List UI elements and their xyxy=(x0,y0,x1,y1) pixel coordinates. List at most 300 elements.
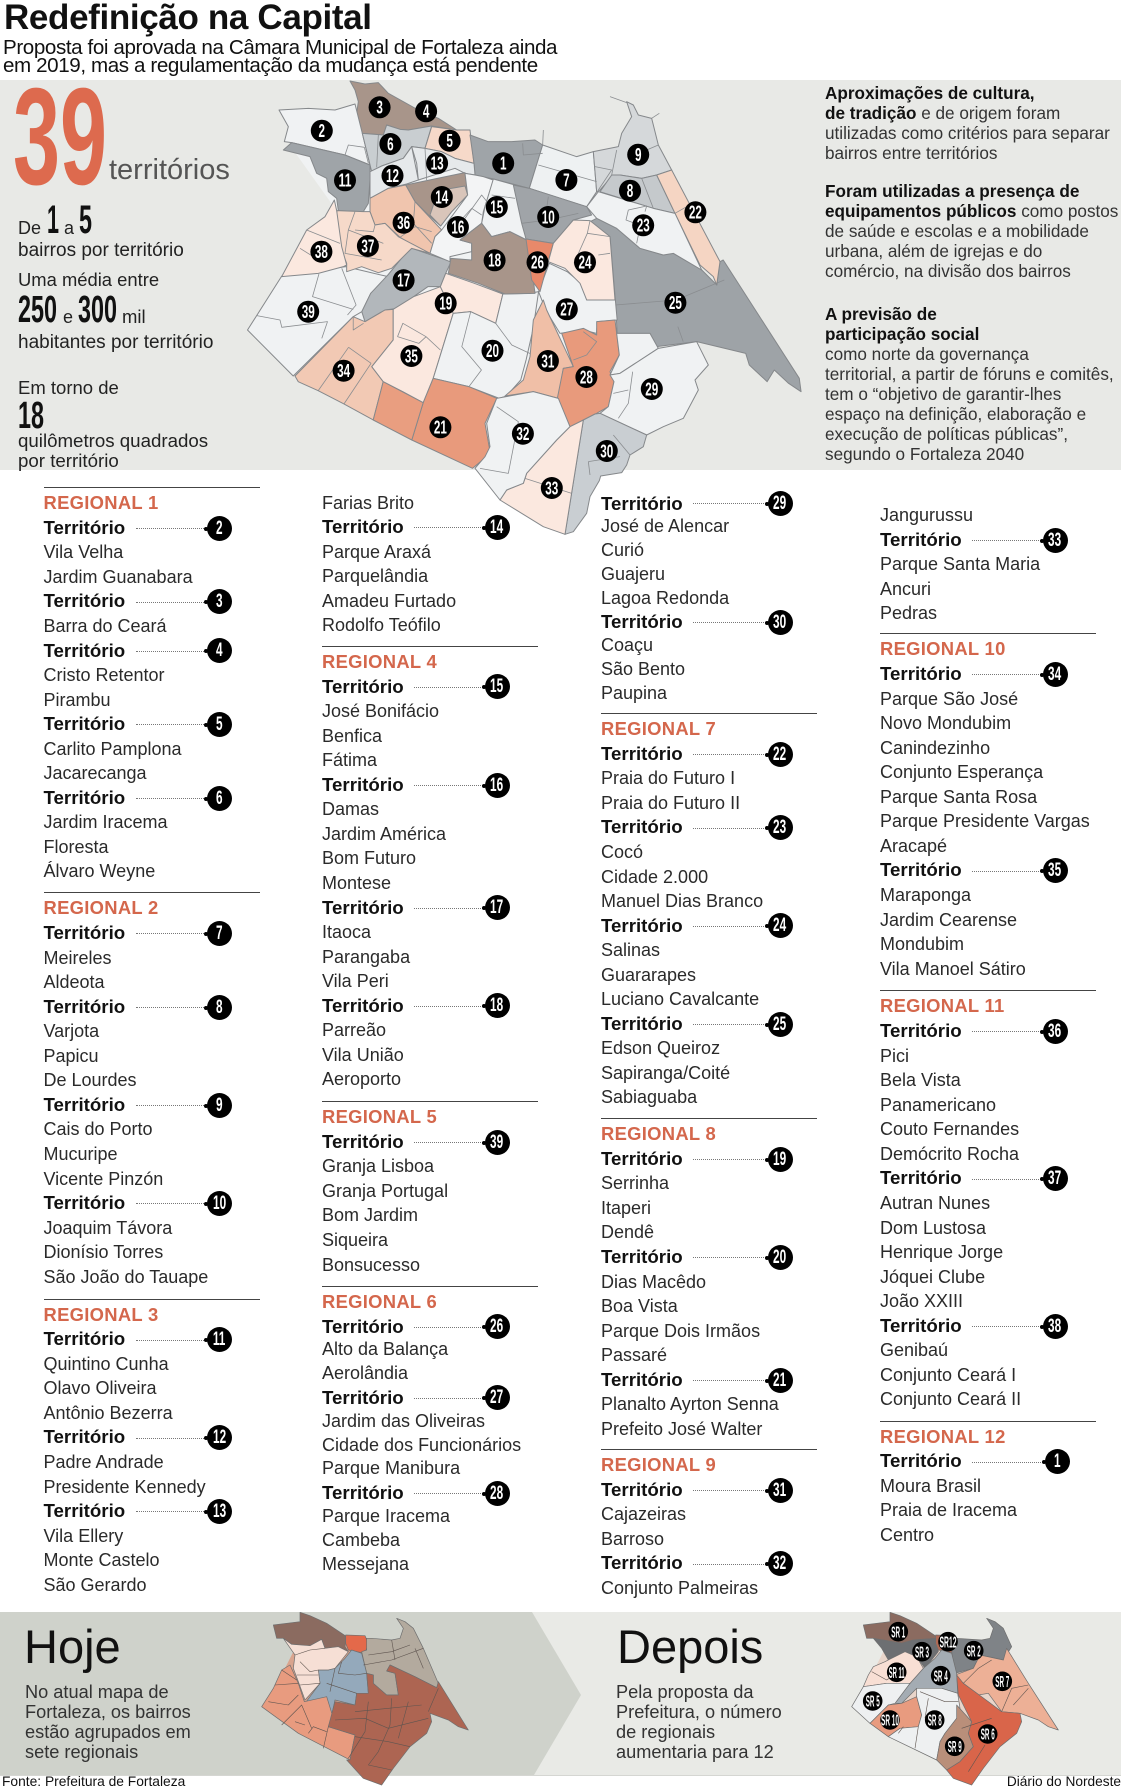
badge SR 5 xyxy=(863,1691,882,1711)
SR badges: SR 8 xyxy=(928,1713,942,1730)
badge SR 3 xyxy=(912,1642,932,1661)
panel: regional 5: Bonsucesso xyxy=(322,1255,420,1275)
território 20: Território xyxy=(601,1246,683,1267)
badge 7: 7 xyxy=(563,170,570,190)
território 12: Território xyxy=(44,1426,125,1447)
panel: regional 10: Novo Mondubim xyxy=(880,713,1011,733)
panel: regional 6: Jardim das Oliveiras xyxy=(322,1411,485,1431)
território 7: 7 xyxy=(216,923,223,944)
map inner fill xyxy=(268,1628,455,1778)
text block: equipamentos públicos: equipamentos públicos como postos xyxy=(825,200,1118,220)
panel: regional 10 xyxy=(880,633,1096,981)
label territórios: territórios xyxy=(109,154,230,186)
panel: regional 8 xyxy=(601,1118,817,1441)
SR badges: SR 6 xyxy=(981,1727,995,1744)
panel: regional 11: Bela Vista xyxy=(880,1070,961,1090)
território 31: 31 xyxy=(773,1480,787,1501)
badge 23: 23 xyxy=(637,216,650,236)
SR 9 xyxy=(937,1705,973,1770)
panel: regional 6 xyxy=(322,1286,538,1574)
território 24 xyxy=(601,913,793,938)
panel: regional 4: Vila União xyxy=(322,1045,404,1065)
panel: regional 3: Presidente Kennedy xyxy=(44,1477,206,1497)
território 3 xyxy=(44,589,232,614)
stat: 250 e 300 mil habitantes: habitantes por território xyxy=(18,332,213,353)
panel: regional 9: Cajazeiras xyxy=(601,1504,686,1524)
panel: regional 4: Damas xyxy=(322,799,379,819)
território 11 xyxy=(44,1327,232,1352)
badge 16: 16 xyxy=(451,217,464,237)
panel: regional 4: Parreão xyxy=(322,1020,386,1040)
panel: regional 2: Papicu xyxy=(44,1046,99,1066)
panel: regional 4: Jardim América xyxy=(322,824,446,844)
SR 5 xyxy=(852,1683,910,1723)
badge SR 1 xyxy=(888,1622,908,1641)
território 34 xyxy=(880,662,1096,687)
panel: regional 9 continued: Parque Santa Maria xyxy=(880,554,1040,574)
territory 28 xyxy=(557,320,619,427)
panel: regional 7: Sabiaguaba xyxy=(601,1087,697,1107)
panel: regional 11: Panamericano xyxy=(880,1095,996,1115)
panel: regional 11: Conjunto Ceará I xyxy=(880,1365,1016,1385)
território 14: 14 xyxy=(490,517,504,538)
território 19: Território xyxy=(601,1148,683,1169)
badge 8: 8 xyxy=(627,181,633,201)
panel: regional 1: Jardim Iracema xyxy=(44,812,168,832)
panel: regional 10: Mondubim xyxy=(880,934,964,954)
panel: regional 3: Padre Andrade xyxy=(44,1452,164,1472)
território 18 xyxy=(322,993,510,1018)
panel: regional 3 xyxy=(44,1299,260,1595)
heading regional 5 xyxy=(322,1101,538,1130)
panel: regional 10: Maraponga xyxy=(880,885,971,905)
badge 31 xyxy=(537,350,559,372)
text block: participação social: segundo o Fortaleza 2040 xyxy=(825,444,1024,464)
territory 29 xyxy=(600,342,708,435)
heading regional 6: REGIONAL 6 xyxy=(322,1291,437,1312)
panel: regional 10: Canindezinho xyxy=(880,738,990,758)
text block: equipamentos públicos: urbana, além de igrejas e do xyxy=(825,240,1042,260)
território 15 xyxy=(322,674,510,699)
territory 20 xyxy=(433,292,539,398)
text block: depois: de regionais xyxy=(616,1722,715,1742)
panel: regional 5 xyxy=(322,1101,538,1275)
panel: regional 1: Vila Velha xyxy=(44,542,123,562)
SR badges: SR 9 xyxy=(948,1739,962,1756)
territory 2 xyxy=(279,104,370,165)
SR 8 xyxy=(888,1688,960,1760)
território 29 xyxy=(601,491,793,516)
territory 33 xyxy=(500,420,583,534)
panel: regional 8: Planalto Ayrton Senna xyxy=(601,1394,779,1414)
text block: cultura e tradição: utilizadas como critérios para separar xyxy=(825,122,1110,142)
território 15: 15 xyxy=(490,676,504,697)
território 2 xyxy=(44,516,232,541)
território 8: Território xyxy=(44,996,125,1017)
panel: regional 9: Conjunto Palmeiras xyxy=(601,1578,758,1598)
text block: participação social: execução de políticas públicas”, xyxy=(825,424,1068,444)
território 12 xyxy=(44,1425,232,1450)
território 27: Território xyxy=(322,1387,404,1408)
heading regional 10: REGIONAL 10 xyxy=(880,638,1006,659)
badge 34 xyxy=(333,360,355,382)
territory 39 xyxy=(248,267,388,376)
text block: depois xyxy=(616,1682,782,1762)
panel: regional 8: Prefeito José Walter xyxy=(601,1419,762,1439)
SR 2 xyxy=(952,1618,1012,1673)
panel: regional 1: Floresta xyxy=(44,837,109,857)
território 39 xyxy=(322,1130,510,1155)
panel: regional 1: Cristo Retentor xyxy=(44,665,165,685)
heading regional 12 xyxy=(880,1420,1096,1449)
badge SR 7 xyxy=(992,1672,1012,1691)
badge 6 xyxy=(379,133,401,155)
badge 32: 32 xyxy=(516,424,529,444)
text block: hoje: Fortaleza, os bairros xyxy=(25,1702,191,1722)
SR badges: SR 10 xyxy=(881,1713,899,1730)
panel: regional 1: Pirambu xyxy=(44,690,111,710)
território 33: 33 xyxy=(1048,530,1062,551)
heading regional 7 xyxy=(601,713,817,742)
território 20: 20 xyxy=(773,1247,787,1268)
badge 23 xyxy=(632,214,654,236)
stat: 18 quilômetros quadrados: 18 xyxy=(18,395,44,437)
território 9: Território xyxy=(44,1094,125,1115)
território 12: 12 xyxy=(213,1427,226,1448)
badge 29 xyxy=(641,378,663,400)
território 26: 26 xyxy=(490,1316,504,1337)
heading regional 3: REGIONAL 3 xyxy=(44,1304,159,1324)
badge SR 4 xyxy=(931,1666,950,1685)
badge 27 xyxy=(556,298,578,320)
território 33 xyxy=(880,528,1096,552)
panel: regional 4: Parangaba xyxy=(322,947,410,967)
panel: regional 2: Varjota xyxy=(44,1021,99,1041)
panel: regional 9 continued xyxy=(880,503,1096,626)
panel: regional 3 continued xyxy=(322,492,510,635)
territory 21 west part xyxy=(373,382,423,440)
território 5: 5 xyxy=(216,714,223,735)
text block: equipamentos públicos xyxy=(825,180,1118,280)
território 26: Território xyxy=(322,1316,404,1337)
território 39: Território xyxy=(322,1131,404,1152)
regional VI xyxy=(328,1665,468,1785)
badge 21: 21 xyxy=(434,418,447,438)
território 28: Território xyxy=(322,1482,404,1503)
badge SR 6 xyxy=(978,1724,998,1744)
heading regional 9: REGIONAL 9 xyxy=(601,1454,716,1475)
panel: regional 11: Conjunto Ceará II xyxy=(880,1389,1021,1409)
território 24: Território xyxy=(601,915,683,936)
badge 13 xyxy=(426,152,448,174)
territory 22 xyxy=(657,170,720,285)
badge 13: 13 xyxy=(431,154,444,174)
panel: regional 6 continued: Paupina xyxy=(601,683,667,703)
stat: 1 a 5 bairros: 5 xyxy=(79,198,92,242)
território 33: Território xyxy=(880,529,962,550)
badge 3: 3 xyxy=(376,98,383,118)
território 21 xyxy=(601,1368,817,1392)
badge 21 xyxy=(429,416,451,438)
território 24: 24 xyxy=(773,915,787,936)
badge 17 xyxy=(393,269,415,291)
badge 32 xyxy=(512,423,534,445)
panel: regional 6: Messejana xyxy=(322,1554,409,1574)
territory 1 xyxy=(470,135,543,188)
território 30: 30 xyxy=(773,612,787,633)
território 19 xyxy=(601,1147,817,1171)
panel: map background xyxy=(0,80,1121,470)
panel: regional 10: Parque Santa Rosa xyxy=(880,787,1037,807)
território 9: 9 xyxy=(216,1095,223,1116)
territory 37 xyxy=(337,211,430,273)
SR badges xyxy=(863,1622,1012,1756)
SR 1 xyxy=(863,1612,937,1643)
badge 25: 25 xyxy=(669,293,682,313)
badge 35: 35 xyxy=(405,346,418,366)
território 4: 4 xyxy=(216,640,223,661)
panel: regional 1: Barra do Ceará xyxy=(44,616,167,636)
territory 19 xyxy=(440,273,503,323)
badge SR 9 xyxy=(945,1736,964,1756)
badge 36: 36 xyxy=(397,213,410,233)
badge 24: 24 xyxy=(578,253,592,273)
territory 38 xyxy=(282,200,347,277)
panel: regional 11: Jóquei Clube xyxy=(880,1267,985,1287)
text block: depois: Pela proposta da xyxy=(616,1682,754,1702)
SR badges: SR12 xyxy=(940,1634,957,1651)
badge 17: 17 xyxy=(397,271,410,291)
panel: bottom band xyxy=(0,1612,1121,1776)
panel: regional 6 continued: São Bento xyxy=(601,659,685,679)
território 6 xyxy=(44,786,232,811)
SR badges: SR 4 xyxy=(934,1668,948,1685)
text block: depois: aumentaria para 12 xyxy=(616,1742,774,1762)
heading regional 5: REGIONAL 5 xyxy=(322,1106,437,1127)
território 14: Território xyxy=(322,516,404,537)
territory 17 xyxy=(362,248,451,322)
text block: hoje: estão agrupados em xyxy=(25,1722,191,1742)
territories 3 and 4 xyxy=(350,81,457,135)
stat: 250 e 300 mil habitantes: e xyxy=(63,307,73,327)
panel: regional 3 continued: Rodolfo Teófilo xyxy=(322,615,441,635)
panel: regional 6 continued: Lagoa Redonda xyxy=(601,588,729,608)
text block: participação social: tem o “objetivo de garantir-lhes xyxy=(825,384,1061,404)
território 32: Território xyxy=(601,1552,683,1573)
panel: regional 6: Aerolândia xyxy=(322,1363,408,1383)
badge 33: 33 xyxy=(545,478,558,498)
SR 11 xyxy=(863,1652,923,1687)
panel: regional 4: Itaoca xyxy=(322,922,371,942)
panel: regional 9 continued: Jangurussu xyxy=(880,505,973,525)
badge SR 2 xyxy=(964,1641,984,1660)
panel: regional 9 continued: Ancuri xyxy=(880,579,931,599)
panel: regional 11: Pici xyxy=(880,1046,909,1066)
território 16: Território xyxy=(322,774,404,795)
text block: cultura e tradição: bairros entre territórios xyxy=(825,142,997,162)
badge 27: 27 xyxy=(560,300,573,320)
território 36: 36 xyxy=(1048,1021,1062,1042)
panel: regional 7: Salinas xyxy=(601,940,660,960)
stat: 18 quilômetros quadrados: quilômetros quadrados xyxy=(18,430,208,451)
panel: regional 6: Parque Manibura xyxy=(322,1458,460,1478)
stat: 1 a 5 bairros: a xyxy=(64,218,75,238)
text block: participação social xyxy=(825,304,1114,464)
badge 9: 9 xyxy=(635,145,641,165)
SR 4 xyxy=(895,1650,958,1703)
território 30 xyxy=(601,610,793,635)
SR badges: SR 1 xyxy=(891,1624,905,1641)
badge 5 xyxy=(439,130,461,152)
território 38 xyxy=(880,1314,1096,1338)
badge 12: 12 xyxy=(386,166,399,186)
badge 8 xyxy=(619,180,641,202)
SR 7 xyxy=(955,1648,1058,1730)
território 20 xyxy=(601,1245,817,1270)
panel: regional 2: Meireles xyxy=(44,948,112,968)
stat: 250 e 300 mil habitantes xyxy=(18,269,213,353)
território 35: 35 xyxy=(1048,860,1062,881)
heading regional 11 xyxy=(880,990,1096,1019)
heading regional 8: REGIONAL 8 xyxy=(601,1123,716,1144)
badge 12 xyxy=(382,165,404,187)
panel: regional 1: Carlito Pamplona xyxy=(44,739,182,759)
badge 9 xyxy=(627,144,649,166)
badge 35 xyxy=(400,345,422,367)
panel: regional 3: Vila Ellery xyxy=(44,1526,123,1546)
badge 20 xyxy=(482,340,504,362)
panel: regional 4: Montese xyxy=(322,873,391,893)
panel: regional 11: Dom Lustosa xyxy=(880,1218,986,1238)
território 17: Território xyxy=(322,897,404,918)
panel: regional 12 xyxy=(880,1420,1096,1547)
territory 26 xyxy=(526,239,553,292)
territory 5 xyxy=(425,127,474,163)
badge 18 xyxy=(484,249,506,271)
badge 11: 11 xyxy=(338,171,352,191)
text block: hoje: sete regionais xyxy=(25,1742,138,1762)
badge 4: 4 xyxy=(423,102,429,122)
text block: cultura e tradição: Aproximações de cultura, xyxy=(825,82,1035,102)
território 2: Território xyxy=(44,517,125,538)
territory 21 xyxy=(412,378,497,468)
panel: regional 6: Parque Iracema xyxy=(322,1506,450,1526)
badge 18: 18 xyxy=(488,251,501,271)
SR 6 xyxy=(947,1675,1022,1785)
panel: regional 3: Quintino Cunha xyxy=(44,1354,169,1374)
heading regional 6 xyxy=(322,1286,538,1315)
territory 32 xyxy=(475,392,570,500)
stat: 250 e 300 mil habitantes: Uma média entre xyxy=(18,269,159,290)
SR badges: SR 5 xyxy=(866,1694,880,1711)
stat: 1 a 5 bairros: De xyxy=(18,218,41,238)
text block: cultura e tradição xyxy=(825,82,1110,162)
badge 19: 19 xyxy=(439,294,452,314)
heading regional 11: REGIONAL 11 xyxy=(880,995,1005,1016)
território 29: Território xyxy=(601,492,683,514)
panel: regional 2: Aldeota xyxy=(44,972,105,992)
badge 37: 37 xyxy=(361,236,374,256)
panel: regional 1: Jacarecanga xyxy=(44,763,147,783)
heading regional 2 xyxy=(44,892,260,921)
território 37: 37 xyxy=(1048,1168,1062,1189)
badge SR 8 xyxy=(925,1710,944,1730)
panel: regional 1: Jardim Guanabara xyxy=(44,567,193,587)
panel: regional 4: Vila Peri xyxy=(322,971,389,991)
território 29: 29 xyxy=(773,493,787,514)
território 32: 32 xyxy=(773,1553,787,1574)
territory 9 xyxy=(593,102,672,192)
text block: cultura e tradição: de tradição e de origem foram xyxy=(825,102,1060,122)
map inner fill xyxy=(858,1628,1045,1778)
território 25: 25 xyxy=(773,1014,787,1035)
territory 29 north part xyxy=(610,333,658,375)
panel: regional 3 continued: Parque Araxá xyxy=(322,542,431,562)
territory 6 xyxy=(362,125,432,172)
territory 35 xyxy=(372,287,453,403)
text block: participação social: espaço na definição, elaboração e xyxy=(825,404,1086,424)
territory 11 xyxy=(283,143,370,212)
stat: 1 a 5 bairros xyxy=(18,198,184,261)
panel: regional 8: Serrinha xyxy=(601,1173,669,1193)
text block: participação social: como norte da governança xyxy=(825,344,1029,364)
text block: equipamentos públicos: de saúde e escolas e a mobilidade xyxy=(825,220,1089,240)
panel: regional 6 continued: Guajeru xyxy=(601,564,665,584)
regional IV xyxy=(305,1650,368,1715)
território 18: Território xyxy=(322,995,404,1016)
território 17: 17 xyxy=(490,897,504,918)
badge 6: 6 xyxy=(387,134,394,154)
panel: regional 4: Benfica xyxy=(322,726,382,746)
panel: regional 5: Granja Lisboa xyxy=(322,1156,434,1176)
território 27: 27 xyxy=(490,1387,504,1408)
território 10: 10 xyxy=(213,1193,226,1214)
panel: regional 7: Cocó xyxy=(601,842,643,862)
panel: regional 11: Genibaú xyxy=(880,1340,948,1360)
territory 25 xyxy=(590,218,801,392)
badge 4 xyxy=(415,100,437,122)
territory 10 xyxy=(513,185,592,243)
panel: regional 10: Jardim Cearense xyxy=(880,910,1017,930)
territory 15 xyxy=(482,179,527,240)
territory 24 xyxy=(548,220,615,300)
badge 15: 15 xyxy=(490,197,503,217)
panel: regional 2: São João do Tauape xyxy=(44,1267,208,1287)
território 22 xyxy=(601,742,793,767)
panel: regional 10: Parque São José xyxy=(880,689,1018,709)
território 27 xyxy=(322,1385,510,1410)
heading regional 4 xyxy=(322,646,538,675)
território 11: Território xyxy=(44,1328,125,1349)
text block: participação social: A previsão de xyxy=(825,304,937,324)
badge 33 xyxy=(541,477,563,499)
stat: 250 e 300 mil habitantes: 250 xyxy=(18,289,57,331)
source note: Fonte: Prefeitura de Fortaleza xyxy=(2,1774,185,1789)
badge 39 xyxy=(297,301,319,323)
panel: regional 11 xyxy=(880,990,1096,1412)
badge SR 11 xyxy=(887,1662,906,1682)
panel: regional 11: Couto Fernandes xyxy=(880,1119,1019,1139)
panel: regional 1 xyxy=(44,487,260,881)
big number 39: 39 xyxy=(13,60,107,214)
territory 31 xyxy=(505,300,573,398)
território 21: Território xyxy=(601,1369,683,1390)
território 14 xyxy=(322,515,510,540)
território 23: 23 xyxy=(773,817,787,838)
território 34: 34 xyxy=(1048,664,1062,685)
território 3: 3 xyxy=(216,591,223,612)
panel: regional 6 continued: Coaçu xyxy=(601,635,653,655)
